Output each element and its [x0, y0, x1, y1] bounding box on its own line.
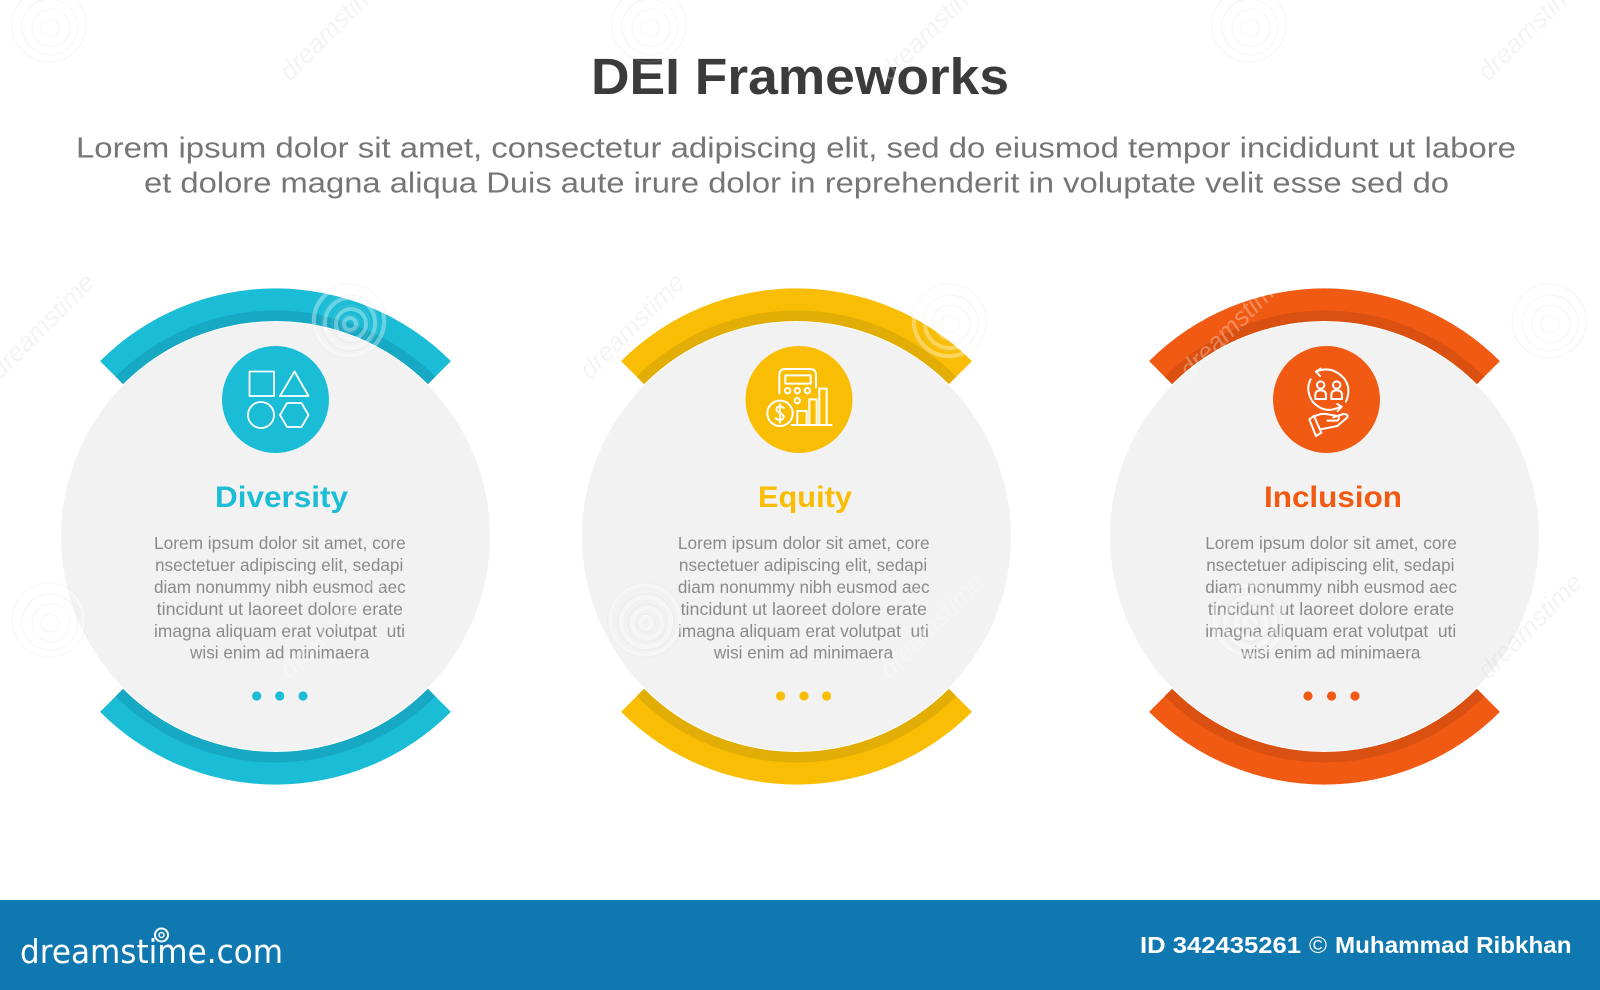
icon: calculator and chart — [746, 346, 852, 453]
bottom arc: inclusion — [1149, 689, 1500, 785]
body text: diversity: nsectetuer adipiscing elit, sedapi — [155, 555, 403, 575]
title: DEI Frameworks — [591, 48, 1009, 105]
body text: inclusion: Lorem ipsum dolor sit amet, core — [1205, 533, 1457, 553]
dots: inclusion — [1303, 691, 1360, 701]
background circle: diversity — [61, 322, 490, 751]
icon: people in a cycle on a hand — [1273, 346, 1380, 453]
body text: inclusion: diam nonummy nibh eusmod aec — [1205, 577, 1457, 597]
body text: equity: tincidunt ut laoreet dolore erate — [681, 599, 927, 619]
subtitle text — [76, 132, 1516, 200]
body text: equity: diam nonummy nibh eusmod aec — [678, 577, 930, 597]
image credit: ID 342435261 — [1140, 932, 1301, 958]
body text: diversity: Lorem ipsum dolor sit amet, core — [154, 533, 406, 553]
footer banner — [0, 900, 1600, 990]
watermark layer: dreamstime — [573, 267, 690, 384]
body text: inclusion: wisi enim ad minimaera — [1240, 642, 1421, 662]
top arc: equity — [621, 288, 972, 384]
icon: shapes — [222, 346, 329, 453]
dots: diversity — [252, 691, 308, 701]
bottom arc: diversity — [100, 689, 451, 785]
watermark layer: dreamstime — [273, 567, 390, 684]
bottom arc: equity — [621, 689, 972, 785]
watermark layer: dreamstime — [873, 567, 990, 684]
image credit: © — [1309, 932, 1327, 958]
body text: equity: wisi enim ad minimaera — [713, 642, 893, 662]
watermark layer: dreamstime — [1173, 267, 1290, 384]
body text: diversity — [154, 533, 406, 662]
top arc: diversity — [100, 288, 451, 384]
body text: diversity: imagna aliquam erat volutpat uti — [154, 621, 405, 641]
image credit: Muhammad Ribkhan — [1335, 932, 1572, 958]
body text: inclusion: tincidunt ut laoreet dolore erate — [1208, 599, 1454, 619]
watermark layer — [0, 0, 1588, 684]
background circle: equity — [582, 322, 1011, 751]
body text: inclusion: nsectetuer adipiscing elit, sedapi — [1206, 555, 1454, 575]
panel: inclusion — [1110, 288, 1539, 785]
subtitle text: et dolore magna aliqua Duis aute irure dolor in reprehenderit in voluptate velit esse sed do — [144, 168, 1449, 200]
image credit — [1140, 932, 1572, 958]
body text: inclusion: imagna aliquam erat volutpat uti — [1205, 621, 1456, 641]
body text: equity: nsectetuer adipiscing elit, sedapi — [679, 555, 927, 575]
subtitle text: Lorem ipsum dolor sit amet, consectetur adipiscing elit, sed do eiusmod tempor incididunt ut labore — [76, 132, 1516, 164]
body text: equity — [678, 533, 930, 662]
heading: diversity: Diversity — [215, 481, 348, 514]
panel: diversity — [61, 288, 490, 785]
heading: inclusion: Inclusion — [1264, 481, 1402, 514]
body text: diversity: diam nonummy nibh eusmod aec — [154, 577, 406, 597]
body text: inclusion — [1205, 533, 1457, 662]
body text: equity: imagna aliquam erat volutpat uti — [678, 621, 929, 641]
watermark layer: dreamstime — [1471, 567, 1588, 684]
top arc: inclusion — [1149, 288, 1500, 384]
body text: equity: Lorem ipsum dolor sit amet, core — [678, 533, 930, 553]
heading: equity: Equity — [758, 481, 852, 514]
panel: equity — [582, 288, 1011, 785]
logo: dreamstime: dreamstime.com — [20, 932, 283, 971]
body text: diversity: wisi enim ad minimaera — [189, 642, 370, 662]
background circle: inclusion — [1110, 322, 1539, 751]
body text: diversity: tincidunt ut laoreet dolore erate — [157, 599, 403, 619]
dots: equity — [776, 691, 831, 701]
